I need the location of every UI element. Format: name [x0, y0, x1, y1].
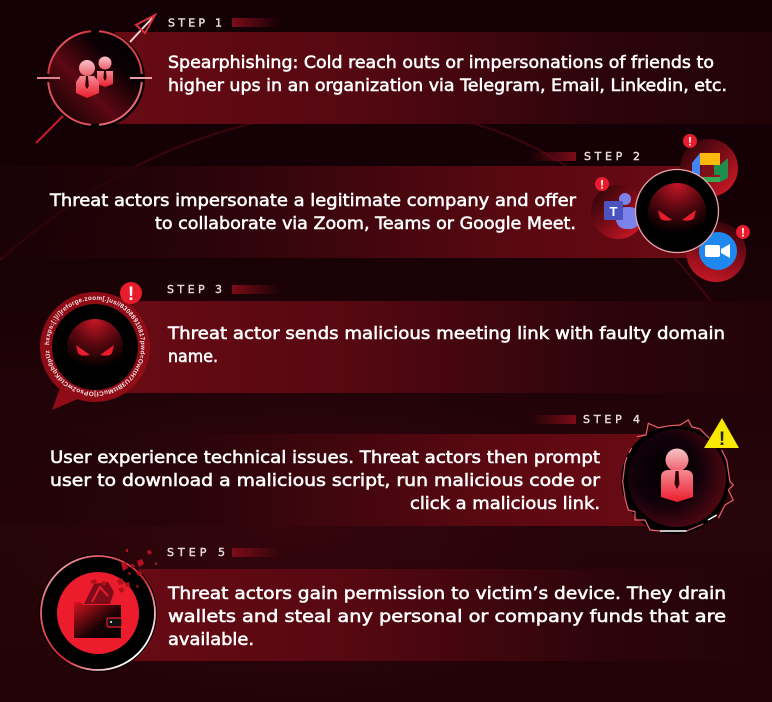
text: technical issues: User experience technical issues. Threat actors then prompt [50, 448, 601, 467]
icon: threat actor face [636, 170, 718, 252]
alert badge [120, 282, 142, 305]
icon: microsoft teams: T [610, 204, 618, 219]
alert badge: ! [128, 284, 134, 305]
step 3 [40, 282, 772, 410]
alert badge: zoom: ! [741, 226, 745, 240]
label: step 1 [168, 16, 280, 30]
label: step 5: STEP 5 [167, 546, 225, 559]
text: drain wallets [167, 584, 726, 649]
text: drain wallets: available. [168, 630, 254, 649]
text: spearphishing: higher ups in an organization via Telegram, Email, Linkedin, etc. [168, 76, 727, 95]
band: step 1 [115, 32, 772, 124]
icon: two people [76, 56, 113, 98]
particles [90, 549, 157, 593]
label: step 2 [530, 150, 640, 163]
text: technical issues: user to download a malicious script, run malicious code or [50, 471, 600, 490]
band: step 5 [125, 569, 772, 661]
text: spearphishing: Spearphishing: Cold reach outs or impersonations of friends to [168, 53, 714, 72]
icon: speech bubble with url ring [40, 282, 150, 410]
wallet [74, 582, 122, 638]
text: impersonate: to collaborate via Zoom, Teams or Google Meet. [155, 214, 576, 233]
icon: target crosshair with arrow [36, 15, 155, 143]
text: impersonate [49, 191, 576, 233]
label: step 3 [167, 283, 280, 296]
crosshair ring arcs [48, 31, 142, 125]
label: step 2: STEP 2 [584, 150, 640, 163]
icon: warning triangle: ! [719, 429, 725, 450]
label: step 1: STEP 1 [168, 16, 222, 30]
text: technical issues [50, 448, 601, 513]
icon: wallet disintegrating [39, 549, 157, 672]
text: technical issues: click a malicious link. [410, 494, 600, 513]
icon: google meet [680, 134, 738, 197]
icon: microsoft teams [591, 177, 645, 239]
label: step 4: STEP 4 [583, 413, 640, 426]
text: malicious meeting link [167, 324, 725, 366]
text: malicious meeting link: Threat actor sends malicious meeting link with faulty domain [167, 324, 725, 343]
label: step 4 [530, 413, 640, 426]
band: step 4 [0, 434, 650, 526]
icon: user [661, 448, 693, 502]
text: impersonate: Threat actors impersonate a legitimate company and offer [49, 191, 576, 210]
step 2 [0, 134, 757, 293]
band: step 3 [125, 301, 772, 393]
step 1 [36, 15, 772, 143]
alert badge: teams: ! [600, 178, 604, 192]
icon: glitched user circle [621, 418, 739, 534]
label: step 3: STEP 3 [167, 283, 222, 296]
url text ring: hxxps:[:]//]reforge.zoom[.]us//83088910817pwd=OwttH7U3BttMuCf]OPso2wCtdKqb0pUz.1 [44, 296, 145, 396]
label: step 5 [167, 546, 280, 559]
step 5 [39, 546, 772, 672]
alert badge: meet: ! [688, 134, 692, 148]
text: drain wallets: wallets and steal any personal or company funds that are [168, 607, 726, 626]
text: spearphishing [168, 53, 727, 95]
band: step 2 [0, 166, 690, 258]
icon: zoom [675, 211, 757, 293]
step 4 [0, 413, 739, 534]
text: malicious meeting link: name. [168, 347, 218, 366]
text: drain wallets: Threat actors gain permission to victim’s device. They drain [167, 584, 726, 603]
